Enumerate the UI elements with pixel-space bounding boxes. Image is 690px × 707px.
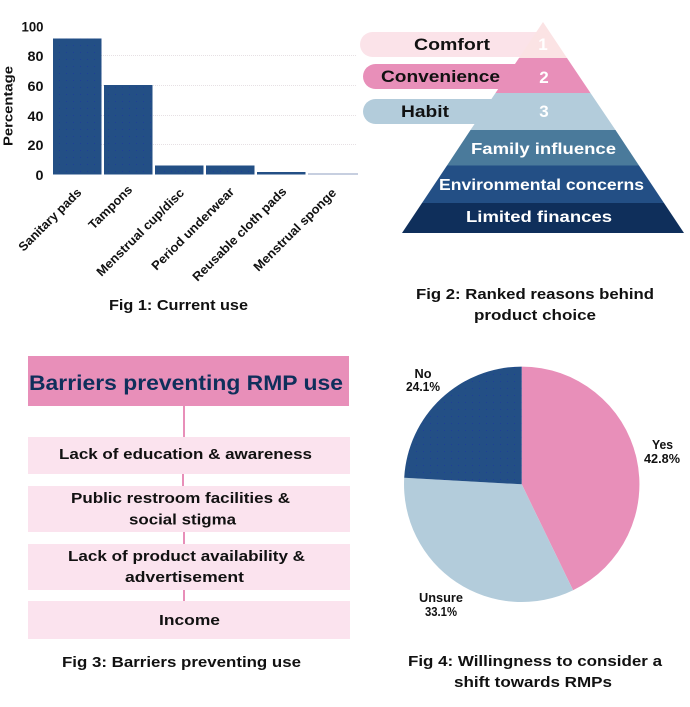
label: yes: 42.8% <box>644 452 680 466</box>
y axis labels: 60 <box>28 79 44 94</box>
pill: convenience <box>363 64 533 89</box>
bars <box>53 38 358 174</box>
pyramid level 3 <box>470 93 616 130</box>
y axis labels: 0 <box>36 168 44 183</box>
pill: habit: Habit <box>401 102 449 121</box>
pill: convenience: Convenience <box>381 67 500 86</box>
slice: yes <box>522 367 639 590</box>
label: unsure: 33.1% <box>425 605 457 619</box>
pyramid level 3: 3 <box>539 102 549 121</box>
label: unsure: Unsure <box>419 591 463 605</box>
pill: comfort: Comfort <box>414 35 490 54</box>
barrier: education: Lack of education & awareness <box>59 446 312 463</box>
barriers header <box>28 356 349 406</box>
pyramid level 4: Family influence <box>471 141 616 158</box>
y axis title: Percentage <box>0 66 16 146</box>
barrier: education <box>28 437 350 474</box>
caption: fig 4 <box>408 653 663 691</box>
label: no: No <box>414 367 432 381</box>
y axis labels: 80 <box>28 49 44 64</box>
caption: fig 3: Fig 3: Barriers preventing use <box>62 654 301 671</box>
x axis labels <box>16 183 339 284</box>
barrier: income: Income <box>159 612 220 629</box>
caption: fig 1: Fig 1: Current use <box>109 297 248 314</box>
caption: fig 2: product choice <box>474 307 596 324</box>
caption: fig 2: Fig 2: Ranked reasons behind <box>416 286 654 303</box>
panel: barriers flow <box>28 356 350 639</box>
pyramid level 5: Environmental concerns <box>439 177 644 194</box>
x axis labels: Period underwear <box>149 185 237 273</box>
x axis labels: Reusable cloth pads <box>190 184 289 284</box>
y axis labels <box>22 20 44 183</box>
slice: unsure <box>404 478 573 602</box>
x axis labels: Tampons <box>86 183 135 232</box>
barrier: restroom and stigma <box>28 486 350 532</box>
barrier: availability <box>28 544 350 590</box>
label: no: 24.1% <box>406 380 440 394</box>
pyramid level 6: Limited finances <box>466 209 612 226</box>
panel: pyramid ranked reasons <box>360 22 684 233</box>
pill: comfort <box>360 32 550 57</box>
barrier: restroom and stigma: Public restroom facilities & <box>71 490 290 507</box>
caption: fig 2 <box>416 286 654 324</box>
caption: fig 4: shift towards RMPs <box>454 674 612 691</box>
barrier: availability: Lack of product availability & <box>68 548 305 565</box>
label: yes: Yes <box>652 438 673 452</box>
label: no <box>406 367 440 394</box>
barrier: restroom and stigma: social stigma <box>129 512 237 528</box>
y axis labels: 40 <box>28 109 44 124</box>
y axis labels: 100 <box>22 20 44 34</box>
pie chart willingness <box>404 367 680 619</box>
x axis labels: Menstrual sponge <box>251 186 339 274</box>
pyramid level 2 <box>496 58 590 93</box>
panel: bar chart current use <box>0 20 358 284</box>
x axis labels: Menstrual cup/disc <box>94 186 187 279</box>
label: unsure <box>419 591 463 619</box>
y axis labels: 20 <box>28 138 44 153</box>
x axis labels: Sanitary pads <box>16 186 84 254</box>
pyramid level 2: 2 <box>539 68 549 87</box>
pyramid level 1: 1 <box>538 35 548 54</box>
pyramid level 4 <box>447 130 639 166</box>
pill: habit <box>363 99 513 124</box>
pyramid level 1 <box>519 22 567 58</box>
caption: fig 4: Fig 4: Willingness to consider a <box>408 653 663 670</box>
label: yes <box>644 438 680 466</box>
pyramid level 5 <box>422 166 664 203</box>
pyramid level 6 <box>402 203 684 233</box>
barrier: income <box>28 601 350 639</box>
barriers header: Barriers preventing RMP use <box>29 371 343 395</box>
barrier: availability: advertisement <box>125 569 244 586</box>
slice: no <box>404 367 522 484</box>
